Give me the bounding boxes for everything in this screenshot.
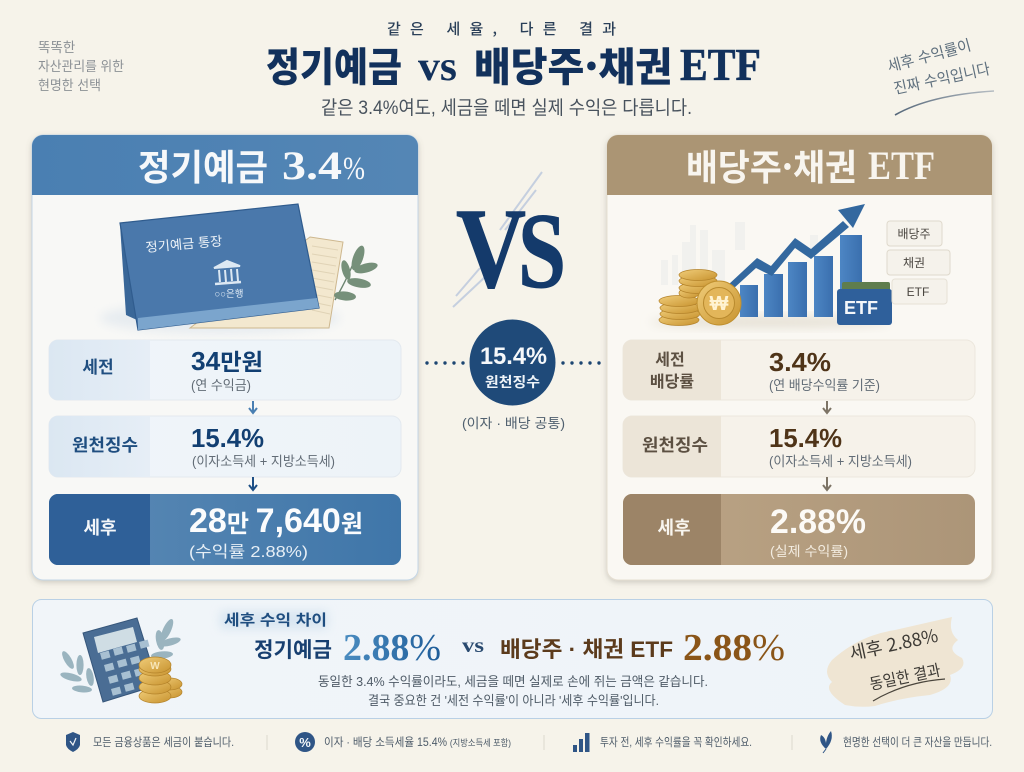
illustration: rising chart with coins [650,204,950,328]
side note: smart asset management: 똑똑한 [38,40,75,55]
icon: won mark: W [150,661,160,672]
side note: smart asset management: 자산관리를 위한 [38,59,124,74]
icon: bank [214,261,241,284]
eyebrow heading: 같은 세율, 다른 결과 [387,18,616,39]
row: after-tax: 2.88% [770,503,866,541]
VS mark: S [518,192,566,311]
panel header: ETF [607,135,992,195]
VS mark: V [456,185,526,312]
icon: percent: % [299,735,311,750]
side note: smart asset management: 현명한 선택 [38,78,101,93]
tag: ETF: ETF [907,285,929,299]
dotted connector right [563,361,600,365]
row: pre-tax: 세전 [82,358,114,377]
comparison: ETF rate [500,627,785,669]
faint skyline [661,222,818,285]
bankbook label: 정기예금 통장 [145,233,223,255]
row: pre-tax dividend: 3.4% [769,347,831,377]
title: ETF [680,40,761,90]
tag: bond: 채권 [903,256,925,270]
row: withholding tax [49,416,401,477]
badge: 15.4% withholding: 15.4% [480,343,547,370]
row: pre-tax: 34만원 [191,346,263,376]
row: pre-tax dividend: (연 배당수익률 기준) [769,378,880,393]
row: pre-tax [49,340,401,400]
row: withholding tax: (이자소득세 + 지방소득세) [192,454,335,469]
tag: dividend stock [887,221,942,246]
row: withholding tax: 15.4% [191,423,264,453]
footer note: bars [573,733,752,752]
row: after-tax: (수익률 2.88%) [189,543,308,561]
illustration: calculator and coins [59,617,182,703]
panel heading text: ETF [868,143,935,188]
row: after-tax: 28만 7,640원 [189,502,363,540]
arrow: down [823,401,831,413]
handwritten note [885,33,994,115]
row: after-tax [623,494,975,565]
tag: bond [887,250,950,275]
footer note: bars: 투자 전, 세후 수익률을 꼭 확인하세요. [600,735,752,749]
icon: leaves [59,617,182,693]
comparison: deposit rate: 정기예금 [254,639,332,662]
icon: coin stack [139,657,182,703]
explanation text [318,674,708,708]
bank name: ○○은행 [215,288,243,300]
row: after-tax: 세후 [657,518,691,538]
tag: ETF [892,279,947,304]
title: 정기예금 [266,35,402,93]
vs: vs [462,635,484,657]
comparison: deposit rate: 2.88% [343,627,441,669]
badge: 15.4% withholding [470,320,556,406]
arrow: growth [728,204,865,289]
row: withholding tax: 원천징수 [642,436,708,455]
row: after-tax: 세후 [83,518,117,538]
row: withholding tax: 원천징수 [72,436,138,455]
badge: 15.4% withholding: 원천징수 [485,374,540,390]
row: withholding tax: (이자소득세 + 지방소득세) [769,454,912,469]
illustration: bankbook [100,204,379,334]
subtitle: 같은 3.4%여도, 세금을 떼면 실제 수익은 다릅니다. [321,97,692,119]
side note: smart asset management [38,40,124,93]
panel heading text: 3.4 [282,143,342,188]
icon: won coin [697,281,741,325]
panel heading text [138,139,365,191]
panel heading text: % [343,151,365,187]
label: after-tax difference: 세후 수익 차이 [224,612,327,629]
calculator [83,618,158,702]
arrow: down [249,477,257,490]
panel: after-tax comparison [32,600,992,718]
tag: dividend stock: 배당주 [897,227,931,241]
icon: percent [295,732,315,752]
arrow: down [823,477,831,490]
panel: fixed deposit [32,135,418,580]
dotted connector left [427,361,464,365]
title: 배당주·채권 [474,35,672,93]
icon: won coin: ₩ [710,293,729,315]
bars [740,235,862,317]
callout: same result [827,617,964,707]
row: pre-tax dividend [623,340,975,400]
row: after-tax [49,494,401,565]
footer note: leaf: 현명한 선택이 더 큰 자산을 만듭니다. [843,736,992,749]
row: pre-tax dividend: 배당률 [650,373,694,391]
ETF box: ETF [844,298,878,318]
footer note: percent [295,732,511,752]
ETF box [837,282,892,325]
row: withholding tax: 15.4% [769,423,842,453]
callout: same result: 동일한 결과 [867,656,943,695]
row: withholding tax [623,416,975,477]
panel heading text: 정기예금 [138,139,268,191]
comparison: deposit rate [254,627,441,669]
panel heading text: 배당주·채권 [686,139,857,191]
callout: same result: 세후 2.88% [847,622,940,666]
row: pre-tax dividend: 세전 [655,351,685,369]
comparison: ETF rate: 배당주 · 채권 ETF [500,637,673,662]
footer note: leaf [820,731,992,753]
title [266,35,761,93]
comparison: ETF rate: 2.88% [683,627,785,669]
handwritten note: 세후 수익률이 [885,33,973,77]
title: vs [418,44,457,90]
row: after-tax: (실제 수익률) [770,544,848,559]
footer separators [267,735,792,750]
explanation text: 결국 중요한 건 '세전 수익률'이 아니라 '세후 수익률'입니다. [368,693,659,708]
icon: shield [66,732,80,752]
explanation text: 동일한 3.4% 수익률이라도, 세금을 떼면 실제로 손에 쥐는 금액은 같습니다. [318,674,708,689]
footer note: shield: 모든 금융상품은 세금이 붙습니다. [93,736,234,749]
VS mark [453,172,566,312]
icon: leaf [820,731,832,753]
arrow: down [249,401,257,413]
panel: dividend and bond ETF [607,135,992,580]
icon: leaves [334,244,379,301]
footer note: percent: 이자 · 배당 소득세율 15.4% (지방소득세 포함) [324,736,511,749]
footer note: shield [66,732,234,752]
row: pre-tax: (연 수익금) [191,378,251,393]
handwritten note: 진짜 수익입니다 [891,57,992,99]
icon: bars [573,733,590,752]
panel header: fixed deposit [32,135,418,195]
caption: common: (이자 · 배당 공통) [462,416,565,431]
icon: coin stacks [659,270,717,326]
